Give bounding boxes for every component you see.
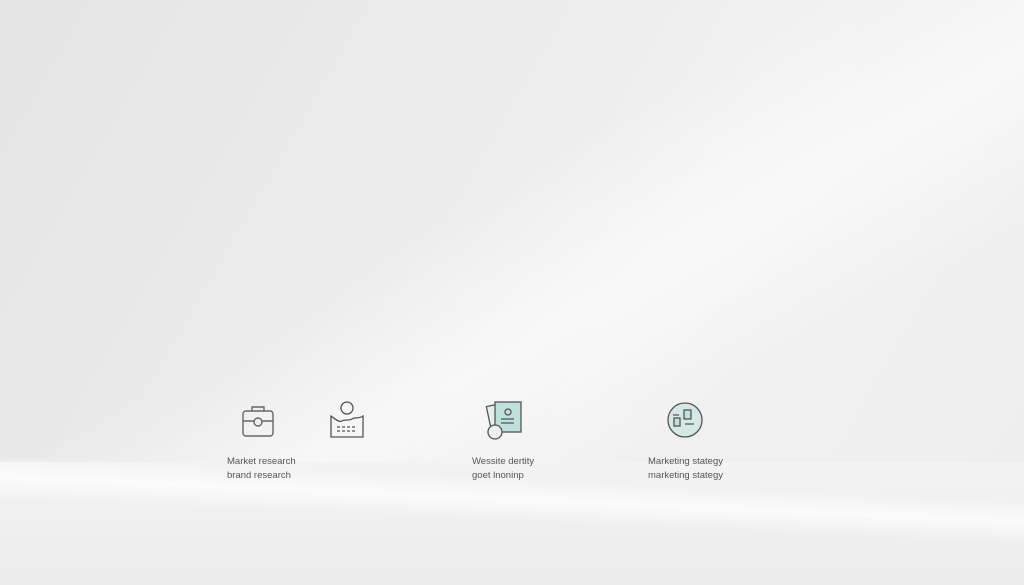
icon: briefcase — [242, 406, 274, 437]
text: marketing strategy: Marketing stategy — [648, 456, 723, 467]
text: market research: Market research — [227, 456, 296, 467]
icon: marketing circle — [667, 402, 703, 438]
icon: keyboard badge — [330, 401, 364, 438]
text: website identity — [472, 456, 534, 481]
text: website identity: goet lnoninp — [472, 470, 524, 481]
text: marketing strategy — [648, 456, 723, 481]
icon: documents — [486, 401, 522, 440]
text: market research — [227, 456, 296, 481]
text: market research: brand research — [227, 470, 291, 481]
text: marketing strategy: marketing stategy — [648, 470, 723, 481]
text: website identity: Wessite dertity — [472, 456, 534, 467]
